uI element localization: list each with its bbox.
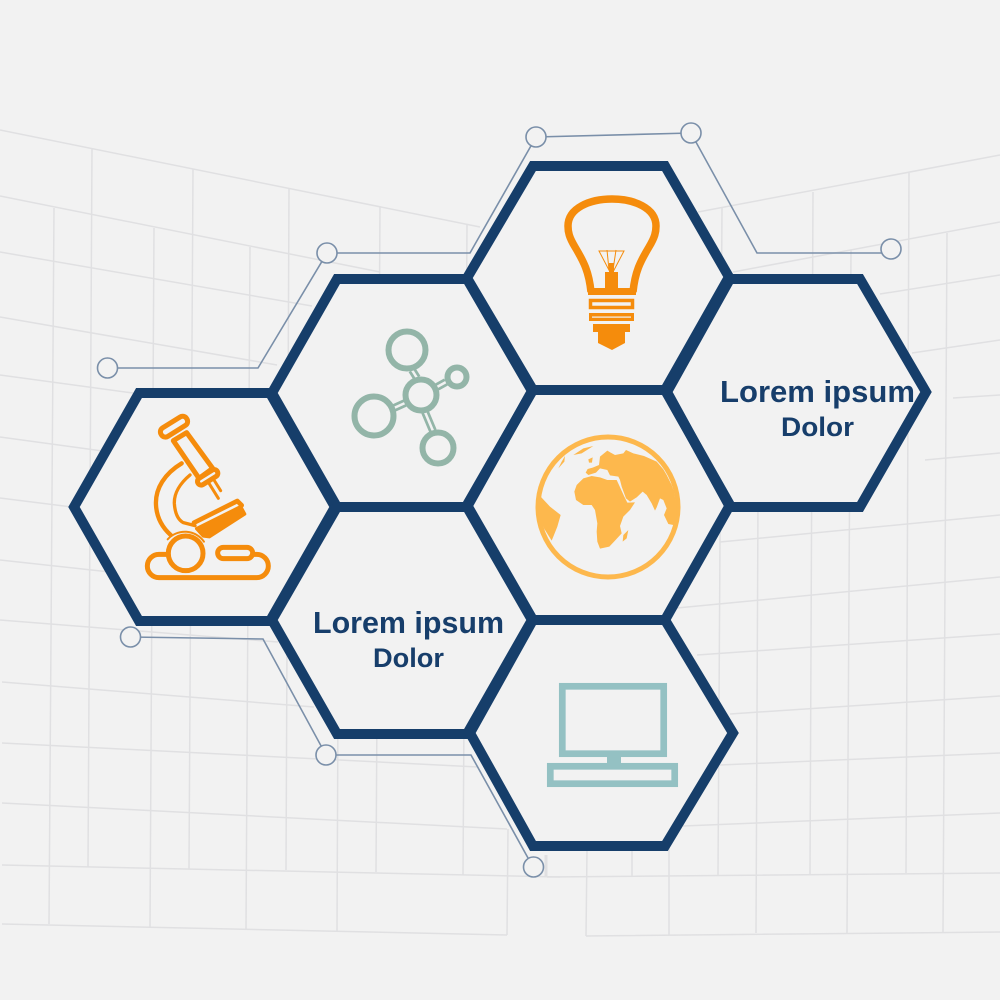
icon: molecule xyxy=(354,332,466,464)
hexagon: computer xyxy=(470,620,733,846)
hexagon: lower text xyxy=(272,507,532,734)
hexagon: microscope xyxy=(74,393,335,621)
icon: light bulb xyxy=(568,199,656,350)
hexagon: light bulb xyxy=(467,166,729,390)
hexagon: top right text xyxy=(667,279,926,507)
icon: computer xyxy=(550,686,675,784)
connector lines xyxy=(107,133,891,867)
background grid: left wall xyxy=(0,130,560,935)
label: upper right hexagon xyxy=(720,374,915,442)
icon: globe xyxy=(538,437,678,577)
hexagon: molecule xyxy=(272,279,532,507)
label: lower hexagon: Lorem ipsum xyxy=(313,605,504,640)
label: upper right hexagon: Lorem ipsum xyxy=(720,374,915,409)
icon: microscope xyxy=(147,414,268,578)
connector nodes xyxy=(98,123,901,877)
label: upper right hexagon: Dolor xyxy=(781,412,855,442)
label: lower hexagon: Dolor xyxy=(373,643,444,673)
background grid: right wall xyxy=(547,155,1000,936)
label: lower hexagon xyxy=(313,605,504,673)
hexagon: globe xyxy=(467,390,730,620)
